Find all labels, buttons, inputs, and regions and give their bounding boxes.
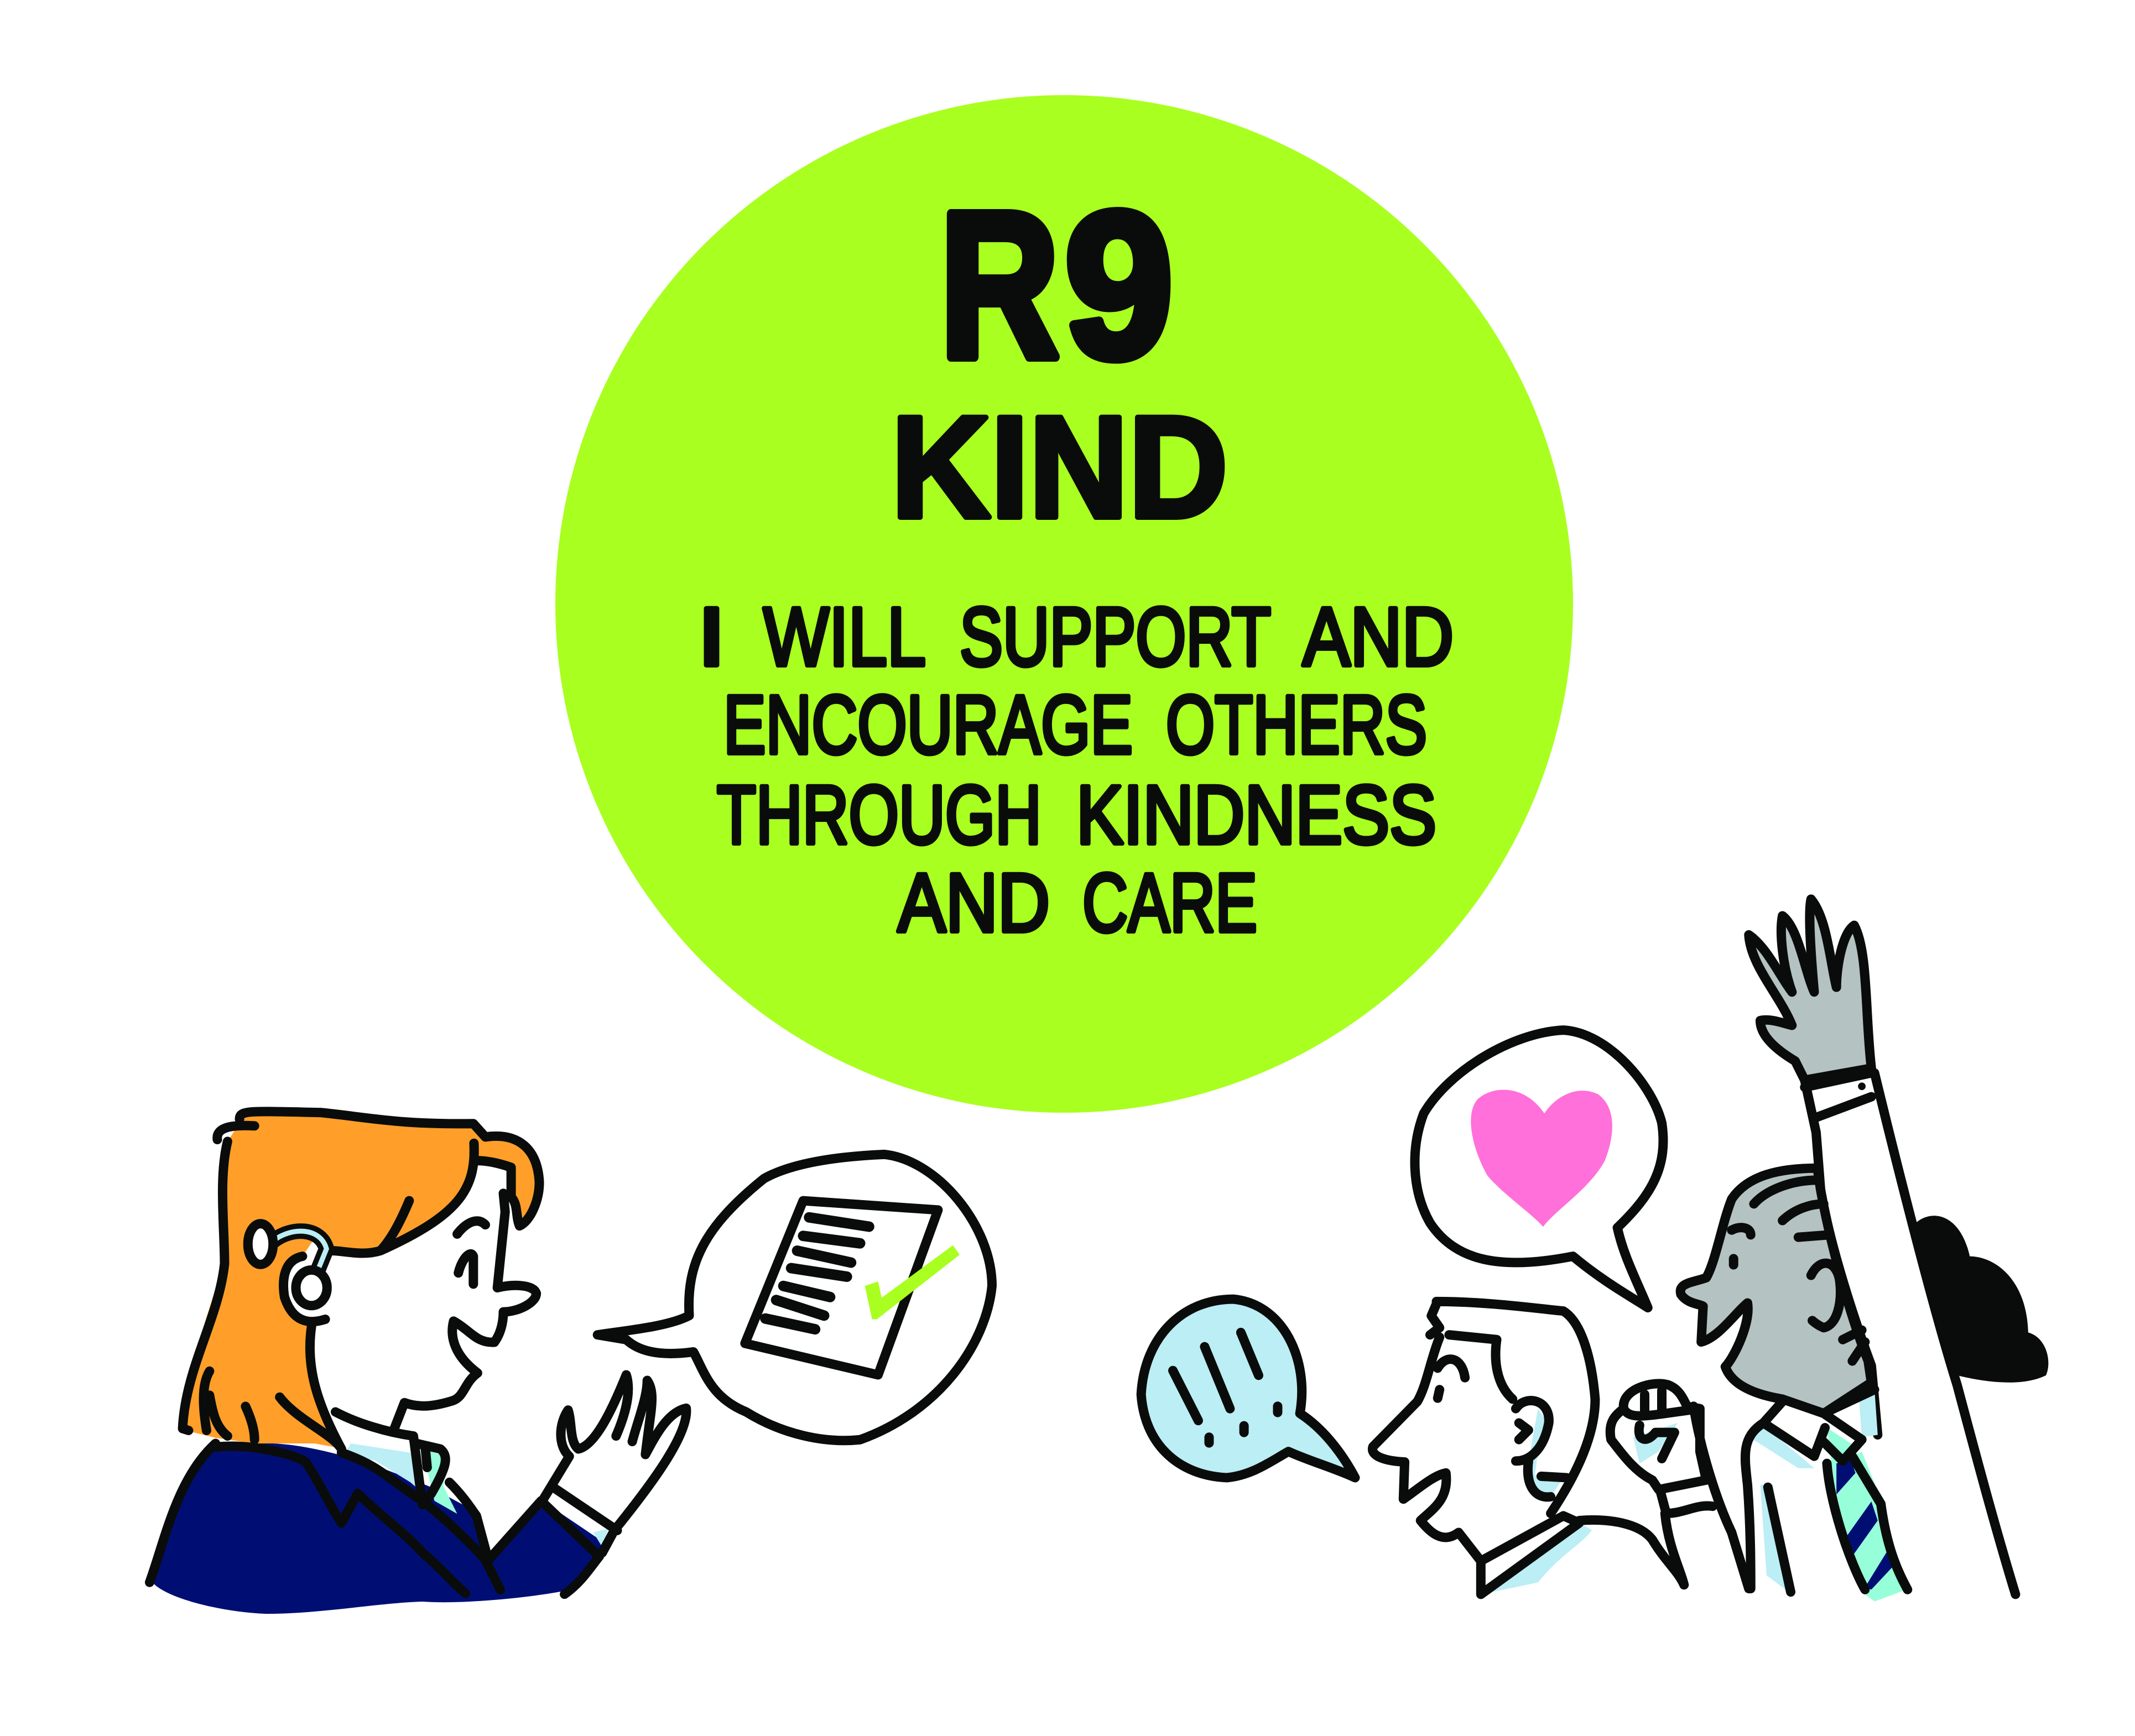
grey head details (1732, 1180, 1865, 1361)
panel: green circle with pledge (555, 95, 1573, 1113)
icon: document (745, 1201, 938, 1375)
speech bubble: document (597, 1154, 992, 1441)
woman shirt and tie (345, 1443, 608, 1547)
text block: pledge: SUPPORT (960, 590, 1271, 683)
text block: pledge: AND (1303, 590, 1454, 683)
icon: pink heart (1471, 1089, 1612, 1227)
text block: pledge: THROUGH (717, 768, 1042, 861)
heading: KIND: KIND (891, 386, 1228, 548)
heading: R9: 9 (1065, 170, 1173, 401)
heading: R9: R (940, 170, 1059, 401)
striped tie (1827, 1428, 1906, 1602)
raised arm (1805, 1073, 2016, 1594)
speech bubble: heart (1415, 1030, 1663, 1308)
heading: R9 (940, 170, 1173, 401)
text block: pledge: OTHERS (1166, 678, 1427, 771)
grey head (1680, 1168, 1871, 1414)
woman outline (149, 1112, 686, 1594)
text block: pledge: I (697, 590, 726, 683)
icon: green check (865, 1245, 960, 1320)
speech bubble: exclamation (1141, 1299, 1355, 1478)
man in profile (1372, 1301, 1684, 1594)
shirt shadows (1481, 1390, 1878, 1594)
fist and arm (1610, 1384, 1749, 1589)
woman hair (184, 1114, 539, 1449)
hair bun (1916, 1216, 2048, 1383)
illustration: woman with hearing aid (149, 1112, 992, 1614)
text block: pledge: KINDNESS (1076, 768, 1436, 861)
woman blazer (153, 1443, 608, 1614)
icon: hearing aid (248, 1224, 327, 1306)
text block: pledge: WILL (763, 590, 926, 683)
text block: pledge: AND (898, 856, 1050, 949)
text block: pledge (697, 590, 1454, 949)
raised hand (1749, 899, 1871, 1080)
text block: pledge: CARE (1082, 856, 1257, 949)
text block: pledge: ENCOURAGE (723, 678, 1133, 771)
illustration: group raising voices (1141, 899, 2048, 1602)
raised-hand person outline (1745, 1390, 1908, 1592)
